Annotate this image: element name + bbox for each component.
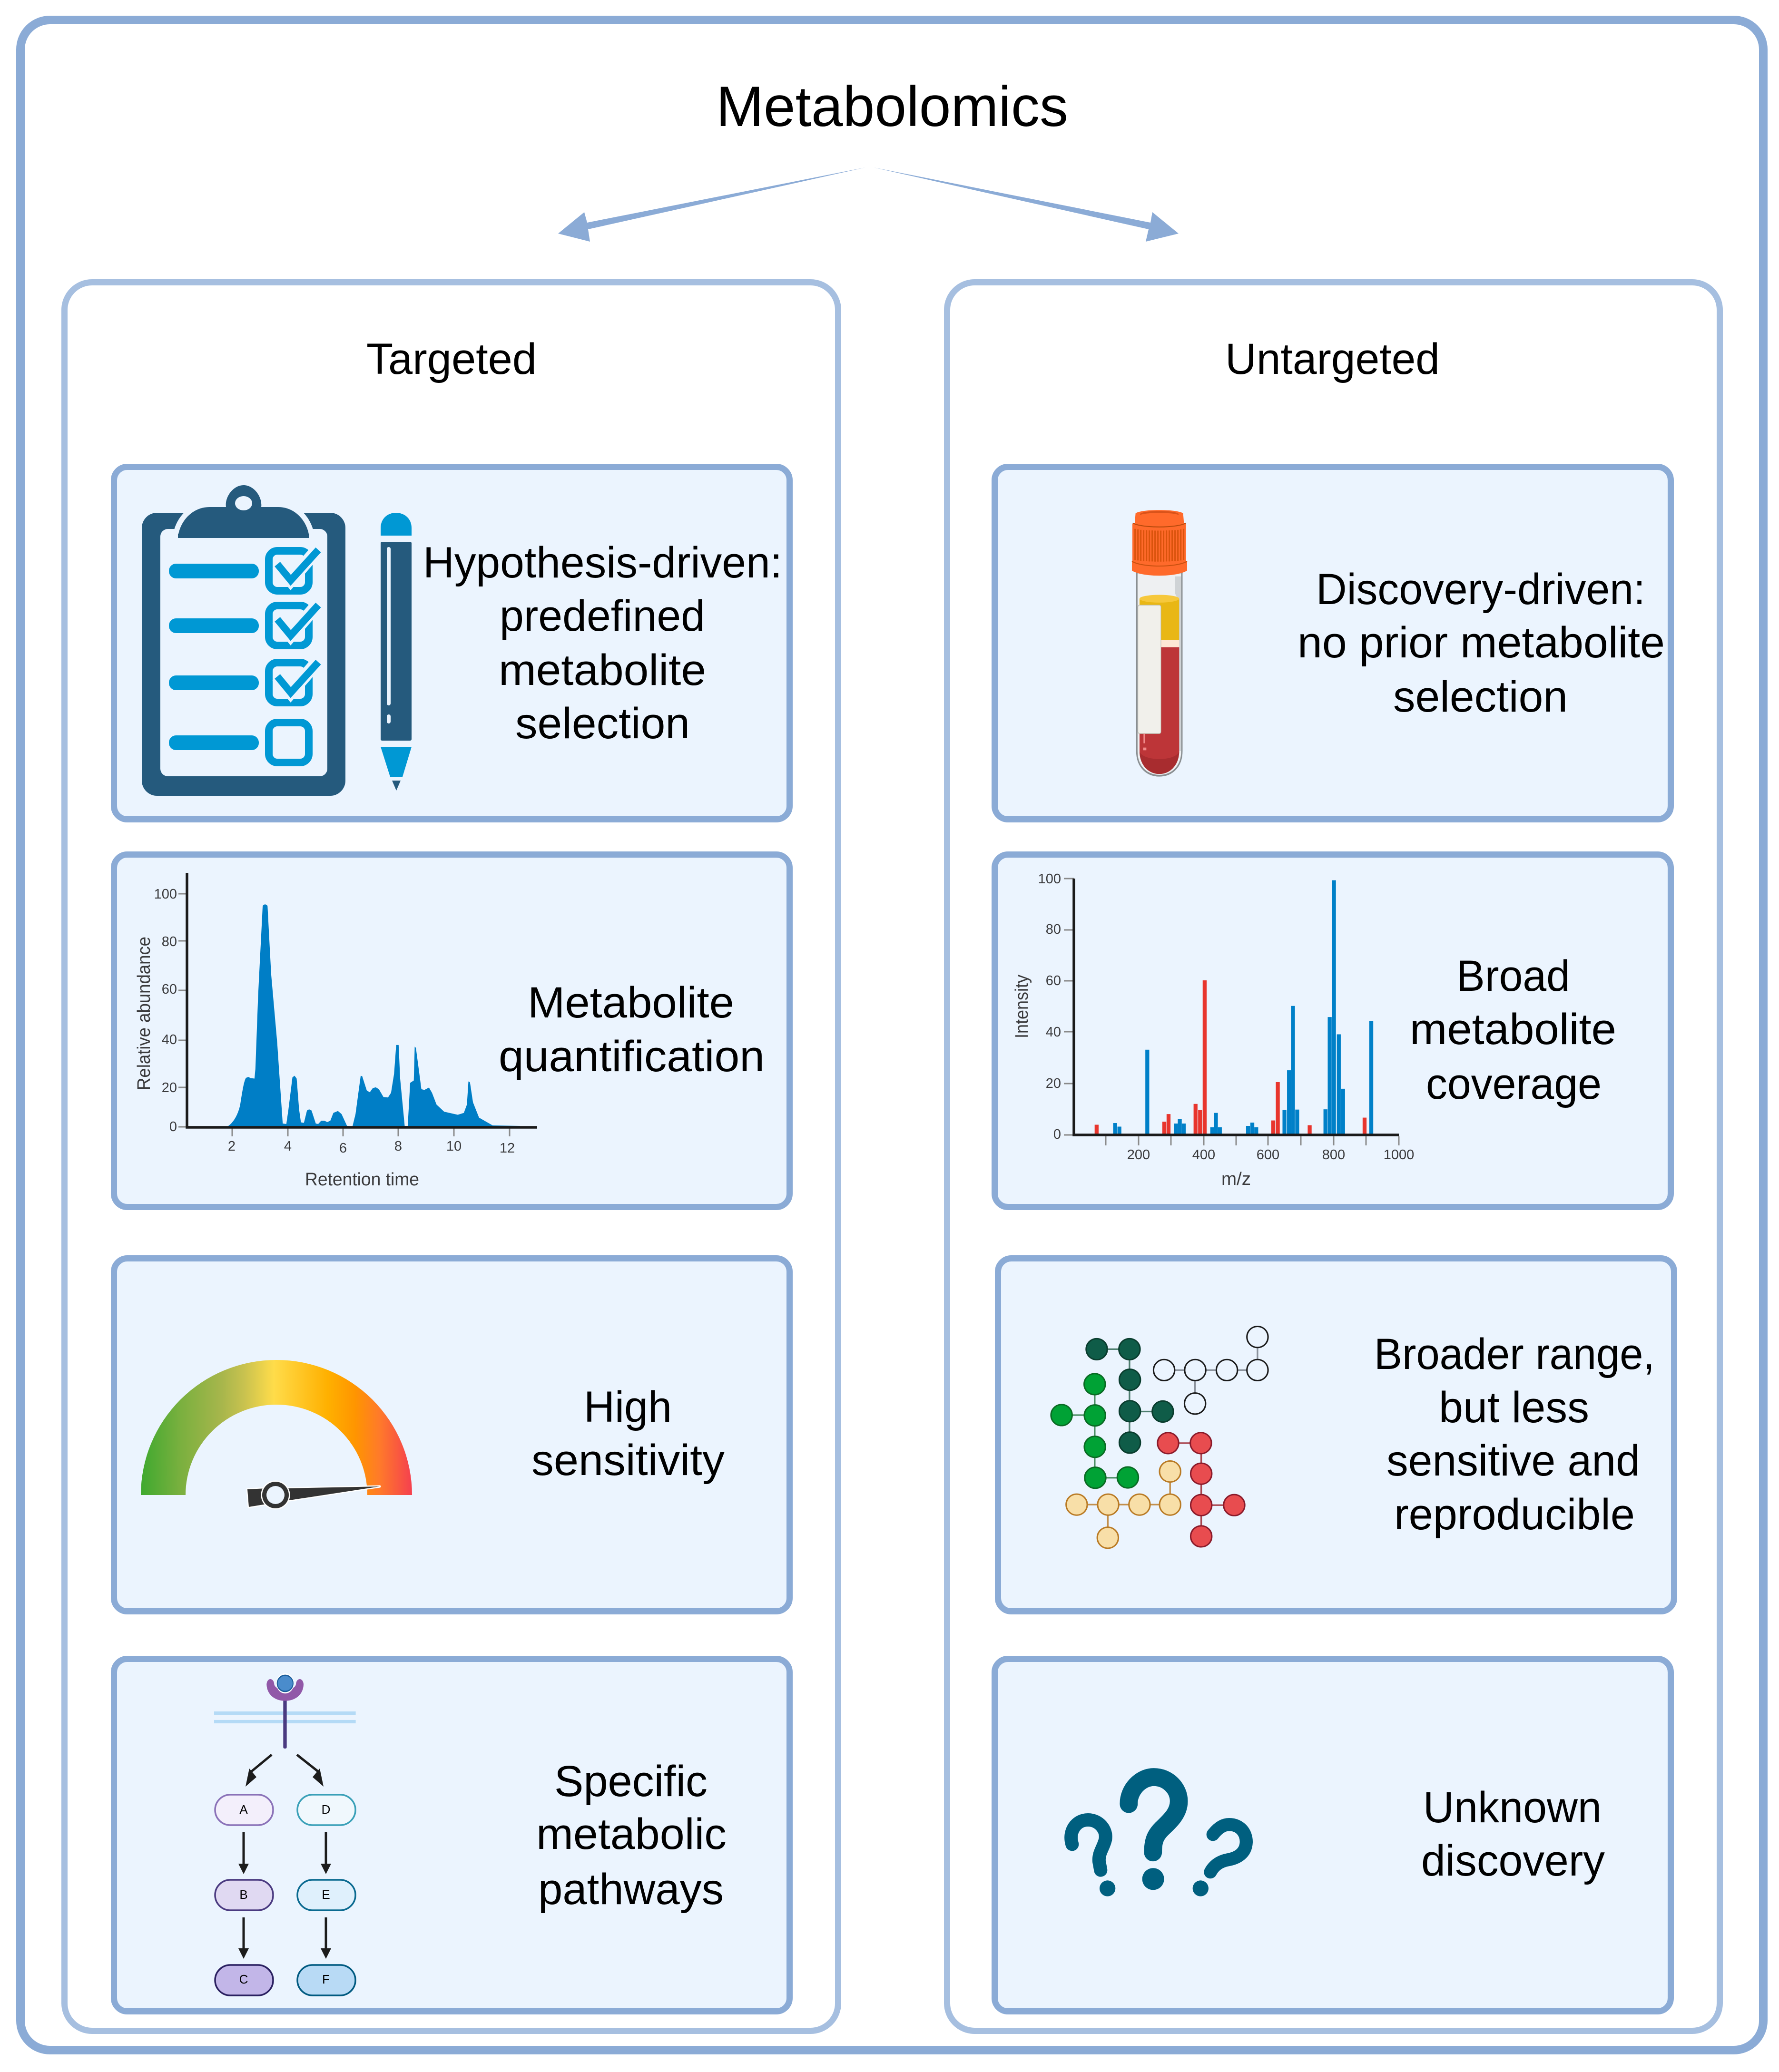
chart: mass spectrum: 0 xyxy=(1053,1127,1061,1142)
icon: sensitivity gauge xyxy=(141,1360,412,1508)
chart: chromatogram: 0 xyxy=(169,1119,177,1134)
card: specific metabolic pathways xyxy=(114,1659,790,2011)
text: broader range: but less xyxy=(1439,1383,1589,1432)
chart: chromatogram: 80 xyxy=(162,934,177,949)
text: hypothesis-driven: Hypothesis-driven: xyxy=(423,538,782,587)
heading: targeted: Targeted xyxy=(366,335,537,383)
arrow: to targeted xyxy=(558,167,865,242)
icon: signalling pathway: B xyxy=(239,1887,248,1902)
title: Metabolomics xyxy=(716,75,1068,138)
chart: mass spectrum: 80 xyxy=(1046,922,1061,937)
card background xyxy=(114,1659,790,2011)
text: broad metabolite coverage xyxy=(1410,952,1616,1108)
icon: signalling pathway: F xyxy=(322,1972,330,1986)
text: broad metabolite coverage: Broad xyxy=(1456,952,1570,1000)
chart: chromatogram: 6 xyxy=(339,1141,347,1156)
icon: pencil xyxy=(381,513,412,791)
heading: untargeted: Untargeted xyxy=(1225,335,1440,383)
text: discovery-driven xyxy=(1297,565,1665,721)
chart: chromatogram: 8 xyxy=(394,1139,402,1154)
chart: chromatogram: Retention time xyxy=(305,1170,419,1190)
card background xyxy=(114,854,790,1207)
chart: mass spectrum: 60 xyxy=(1046,973,1061,988)
chart: chromatogram xyxy=(134,873,537,1190)
chart: mass spectrum: 200 xyxy=(1127,1147,1150,1163)
icon: signalling pathway: A xyxy=(239,1802,248,1817)
text: discovery-driven: no prior metabolite xyxy=(1297,618,1665,667)
card background xyxy=(994,467,1671,819)
text: unknown discovery: Unknown xyxy=(1423,1783,1602,1832)
card: unknown discovery xyxy=(994,1659,1671,2011)
text: hypothesis-driven: predefined xyxy=(500,592,705,640)
chart: chromatogram: Relative abundance xyxy=(134,937,154,1090)
icon: question marks xyxy=(1071,1777,1246,1896)
card: broad metabolite coverage xyxy=(994,854,1671,1207)
text: metabolite quantification: Metabolite xyxy=(528,978,734,1027)
card background xyxy=(994,1659,1671,2011)
text: unknown discovery: discovery xyxy=(1421,1837,1605,1885)
text: hypothesis-driven: selection xyxy=(515,699,690,748)
open cluster xyxy=(1153,1327,1268,1414)
text: metabolite quantification xyxy=(499,978,765,1081)
icon: signalling pathway: C xyxy=(239,1972,248,1986)
text: discovery-driven: selection xyxy=(1393,673,1568,721)
text: hypothesis-driven xyxy=(423,538,782,748)
card background xyxy=(114,1259,790,1612)
chart: chromatogram: 2 xyxy=(228,1139,236,1154)
chart: chromatogram: 20 xyxy=(162,1080,177,1095)
text: discovery-driven: Discovery-driven: xyxy=(1316,565,1645,614)
chart: mass spectrum: 100 xyxy=(1038,871,1061,887)
green cluster xyxy=(1051,1374,1139,1488)
text: high sensitivity: sensitivity xyxy=(531,1436,725,1485)
icon: signalling pathway: D xyxy=(322,1802,330,1817)
chart: chromatogram: 12 xyxy=(500,1141,515,1156)
text: broad metabolite coverage: metabolite xyxy=(1410,1005,1616,1054)
text: unknown discovery xyxy=(1421,1783,1605,1885)
chart: mass spectrum: m/z xyxy=(1221,1169,1251,1189)
icon: signalling pathway: E xyxy=(322,1887,330,1902)
chart: chromatogram: 60 xyxy=(162,982,177,997)
card background xyxy=(998,1259,1674,1612)
arrows xyxy=(238,1755,331,1959)
panel: untargeted xyxy=(947,283,1720,2031)
pills xyxy=(215,1795,355,1995)
chart: chromatogram: 10 xyxy=(446,1139,462,1154)
arrow: to untargeted xyxy=(874,167,1179,242)
membrane and receptor xyxy=(214,1673,356,1749)
icon: clipboard with checklist xyxy=(142,485,345,796)
tan cluster xyxy=(1066,1461,1180,1548)
card background xyxy=(994,854,1671,1207)
text: specific metabolic pathways: Specific xyxy=(554,1757,708,1806)
card background xyxy=(114,467,790,819)
chart: mass spectrum: 600 xyxy=(1257,1147,1279,1163)
text: broader range xyxy=(1374,1330,1655,1539)
card: broader range xyxy=(998,1259,1674,1612)
chart: mass spectrum xyxy=(1012,871,1414,1189)
text: broad metabolite coverage: coverage xyxy=(1426,1060,1602,1108)
untargeted panel frame xyxy=(947,283,1720,2031)
icon: molecular network xyxy=(1051,1327,1268,1548)
text: broader range: sensitive and xyxy=(1386,1437,1640,1485)
text: hypothesis-driven: metabolite xyxy=(499,646,706,694)
text: broader range: reproducible xyxy=(1394,1490,1635,1539)
card: metabolite quantification xyxy=(114,854,790,1207)
text: broader range: Broader range, xyxy=(1374,1330,1655,1378)
chart: mass spectrum: 800 xyxy=(1322,1147,1345,1163)
text: high sensitivity: High xyxy=(584,1383,672,1431)
text: specific metabolic pathways: pathways xyxy=(538,1865,724,1914)
text: specific metabolic pathways xyxy=(536,1757,727,1914)
card: discovery-driven xyxy=(994,467,1671,819)
text: specific metabolic pathways: metabolic xyxy=(536,1810,727,1858)
icon: signalling pathway xyxy=(214,1673,356,1995)
text: metabolite quantification: quantification xyxy=(499,1032,765,1081)
card: high sensitivity xyxy=(114,1259,790,1612)
card: hypothesis-driven xyxy=(114,467,790,819)
text: high sensitivity xyxy=(531,1383,725,1485)
dark green cluster xyxy=(1086,1339,1173,1453)
chart: mass spectrum: 20 xyxy=(1046,1076,1061,1091)
chart: chromatogram: 100 xyxy=(154,887,177,902)
chart: chromatogram: 40 xyxy=(162,1032,177,1047)
chart: mass spectrum: 1000 xyxy=(1384,1147,1414,1163)
chart: mass spectrum: 40 xyxy=(1046,1025,1061,1040)
icon: blood collection tube xyxy=(1132,510,1187,776)
targeted panel frame xyxy=(65,283,838,2031)
red cluster xyxy=(1158,1433,1245,1547)
chart: mass spectrum: 400 xyxy=(1192,1147,1215,1163)
chart: chromatogram: 4 xyxy=(284,1139,292,1154)
panel: targeted xyxy=(65,283,838,2031)
chart: mass spectrum: Intensity xyxy=(1012,975,1032,1038)
